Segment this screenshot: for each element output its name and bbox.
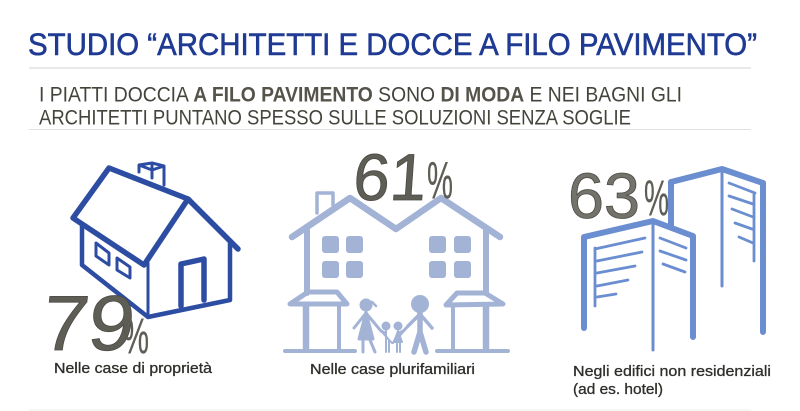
label [573,364,771,398]
percentage: 61%: 61 [351,141,429,215]
label: Negli edifici non residenziali [573,364,771,380]
label: Nelle case plurifamiliari [310,362,475,378]
percentage: 79%: % [123,308,149,364]
label: (ad es. hotel) [573,382,663,398]
icon: single-family house [73,163,238,317]
percentage: 63%: % [644,170,669,226]
intro text: I PIATTI DOCCIA A FILO PAVIMENTO SONO DI MODA E NEI BAGNI GLI [39,84,682,106]
panel: edifici non residenziali [568,160,771,398]
icon: multi-family house [285,193,508,351]
intro text: ARCHITETTI PUNTANO SPESSO SULLE SOLUZIONI SENZA SOGLIE [39,106,631,130]
icon: office buildings [584,169,763,350]
percentage: 61%: % [427,152,453,210]
percentage: 63%: 63 [568,160,640,232]
title: STUDIO “ARCHITETTI E DOCCE A FILO PAVIMENTO” [28,26,757,62]
intro text [39,84,682,130]
label: Nelle case di proprietà [54,361,213,377]
panel: case di proprietà [38,163,238,377]
icon: family [354,295,432,352]
panel: case plurifamiliari [285,141,508,378]
percentage: 79%: 79 [38,279,139,367]
